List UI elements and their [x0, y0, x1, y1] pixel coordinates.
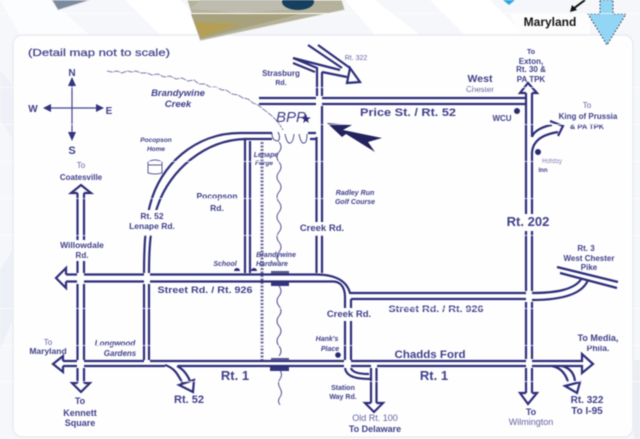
map labels: Station — [331, 385, 355, 392]
map labels: Phila. — [587, 343, 609, 353]
map labels: Creek — [165, 99, 192, 110]
map labels: Rt. 1 — [420, 368, 448, 383]
road: Rt 52 south branch — [165, 365, 194, 392]
map labels: Longwood — [95, 339, 136, 348]
road: Kennett Square — [71, 185, 91, 392]
road: Lenape Rd — [144, 133, 316, 360]
map labels: & PA TPK — [570, 122, 605, 131]
map labels: Rt. 202 — [507, 214, 549, 229]
BPP location star — [301, 114, 311, 123]
road: Rt 322 arrow — [308, 45, 360, 83]
map labels: To Media, — [578, 333, 618, 343]
map labels: Holiday — [542, 159, 562, 165]
map labels: Price St. / Rt. 52 — [360, 107, 456, 119]
map labels: Rt. 322 — [571, 395, 604, 406]
road: Old Rt 100 — [345, 368, 383, 412]
map labels: To I-95 — [571, 406, 603, 417]
map labels: Street Rd. / Rt. 926 — [158, 285, 252, 296]
map labels: BPP — [276, 109, 306, 126]
map labels: Rt. 3 — [577, 244, 595, 253]
map labels: Rt. 52 — [140, 211, 164, 221]
map labels: Rt. 52 — [174, 394, 204, 406]
location markers — [234, 108, 541, 358]
map labels: West — [468, 73, 493, 85]
roads — [53, 45, 618, 412]
map labels: Home — [147, 146, 165, 153]
icon: blue down arrow — [588, 0, 626, 45]
road: Strasburg and Creek Rd — [293, 58, 347, 273]
compass: W — [28, 104, 38, 115]
map labels: To — [44, 338, 53, 347]
map labels: Pike — [581, 263, 598, 272]
map labels: Creek Rd. — [300, 223, 344, 234]
map labels: Brandywine — [256, 252, 296, 259]
map labels: Maryland — [29, 346, 67, 356]
map labels: Golf Course — [335, 199, 375, 206]
road: Rt 3 — [557, 267, 618, 288]
map labels: Pocopson — [196, 191, 238, 201]
creek — [107, 71, 307, 405]
icon: cyan marker — [503, 0, 515, 5]
map labels: Coatesville — [60, 173, 103, 182]
photo: stone and water — [187, 0, 345, 41]
map labels: Square — [65, 418, 95, 428]
photo: small top-left — [52, 0, 90, 10]
map labels: Way Rd. — [329, 394, 357, 401]
road: Street Rd west — [56, 268, 588, 360]
road: Rt 322 south branch — [552, 366, 580, 393]
compass: S — [68, 145, 76, 157]
compass — [28, 68, 113, 157]
map labels: Street Rd. / Rt. 926 — [388, 304, 484, 314]
road: King of Prussia branch — [532, 121, 563, 152]
map labels: To — [77, 161, 86, 170]
map labels: Rd. — [275, 80, 287, 87]
map labels: Exton, — [519, 57, 543, 66]
map labels: School — [213, 261, 238, 268]
map labels: Willowdale — [60, 240, 104, 250]
road: Rt 202 — [520, 83, 537, 404]
map labels: West Chester — [564, 254, 614, 263]
map labels: To — [527, 49, 535, 56]
map labels: Rd. — [210, 203, 224, 213]
map labels: Inn — [538, 168, 548, 174]
map labels: Pocopson — [140, 137, 172, 144]
label: Maryland: Maryland — [524, 15, 576, 29]
map labels: To — [526, 407, 537, 417]
map labels: Brandywine — [151, 88, 206, 99]
note: not to scale: (Detail map not to scale) — [28, 47, 170, 59]
bridges — [270, 271, 289, 371]
map labels: Wilmington — [509, 417, 553, 427]
icon: black arrow to Maryland — [570, 0, 585, 12]
icon: Pocopson Home — [148, 160, 162, 174]
arrow to BPP — [327, 123, 382, 152]
map labels: To — [75, 396, 86, 406]
compass: N — [68, 68, 76, 79]
map labels: Creek Rd. — [327, 309, 371, 320]
road: Price St — [259, 98, 526, 104]
map labels: Hank's — [316, 336, 338, 343]
railroad — [260, 142, 264, 360]
road gaps behind labels — [60, 210, 554, 321]
compass: E — [106, 106, 113, 117]
map labels: Forge — [255, 160, 273, 167]
map labels: Rt. 1 — [221, 368, 249, 383]
map labels: Radley Run — [336, 190, 374, 197]
map labels: Chadds Ford — [394, 349, 466, 361]
map labels: Old Rt. 100 — [352, 413, 398, 423]
map labels: WCU — [492, 114, 512, 123]
road: Rt 1 — [53, 354, 593, 373]
map labels: Place — [321, 346, 339, 353]
map labels: Kennett — [63, 408, 97, 418]
map labels: Chester — [466, 85, 494, 94]
map labels: Lenape — [254, 152, 278, 159]
map labels: Rd. — [76, 251, 88, 260]
map labels: Rt. 30 & — [516, 65, 546, 74]
map labels: Lenape Rd. — [129, 221, 175, 231]
map labels: Gardens — [104, 349, 137, 358]
map labels: Rt. 322 — [345, 55, 367, 62]
map labels: PA TPK — [517, 75, 545, 84]
map labels: Strasburg — [262, 69, 300, 78]
map labels: To — [583, 101, 592, 110]
map labels: Hardware — [256, 261, 288, 268]
road: Pocopson Rd — [245, 139, 250, 273]
map labels: King of Prussia — [559, 112, 618, 121]
map labels: To Delaware — [349, 424, 401, 434]
